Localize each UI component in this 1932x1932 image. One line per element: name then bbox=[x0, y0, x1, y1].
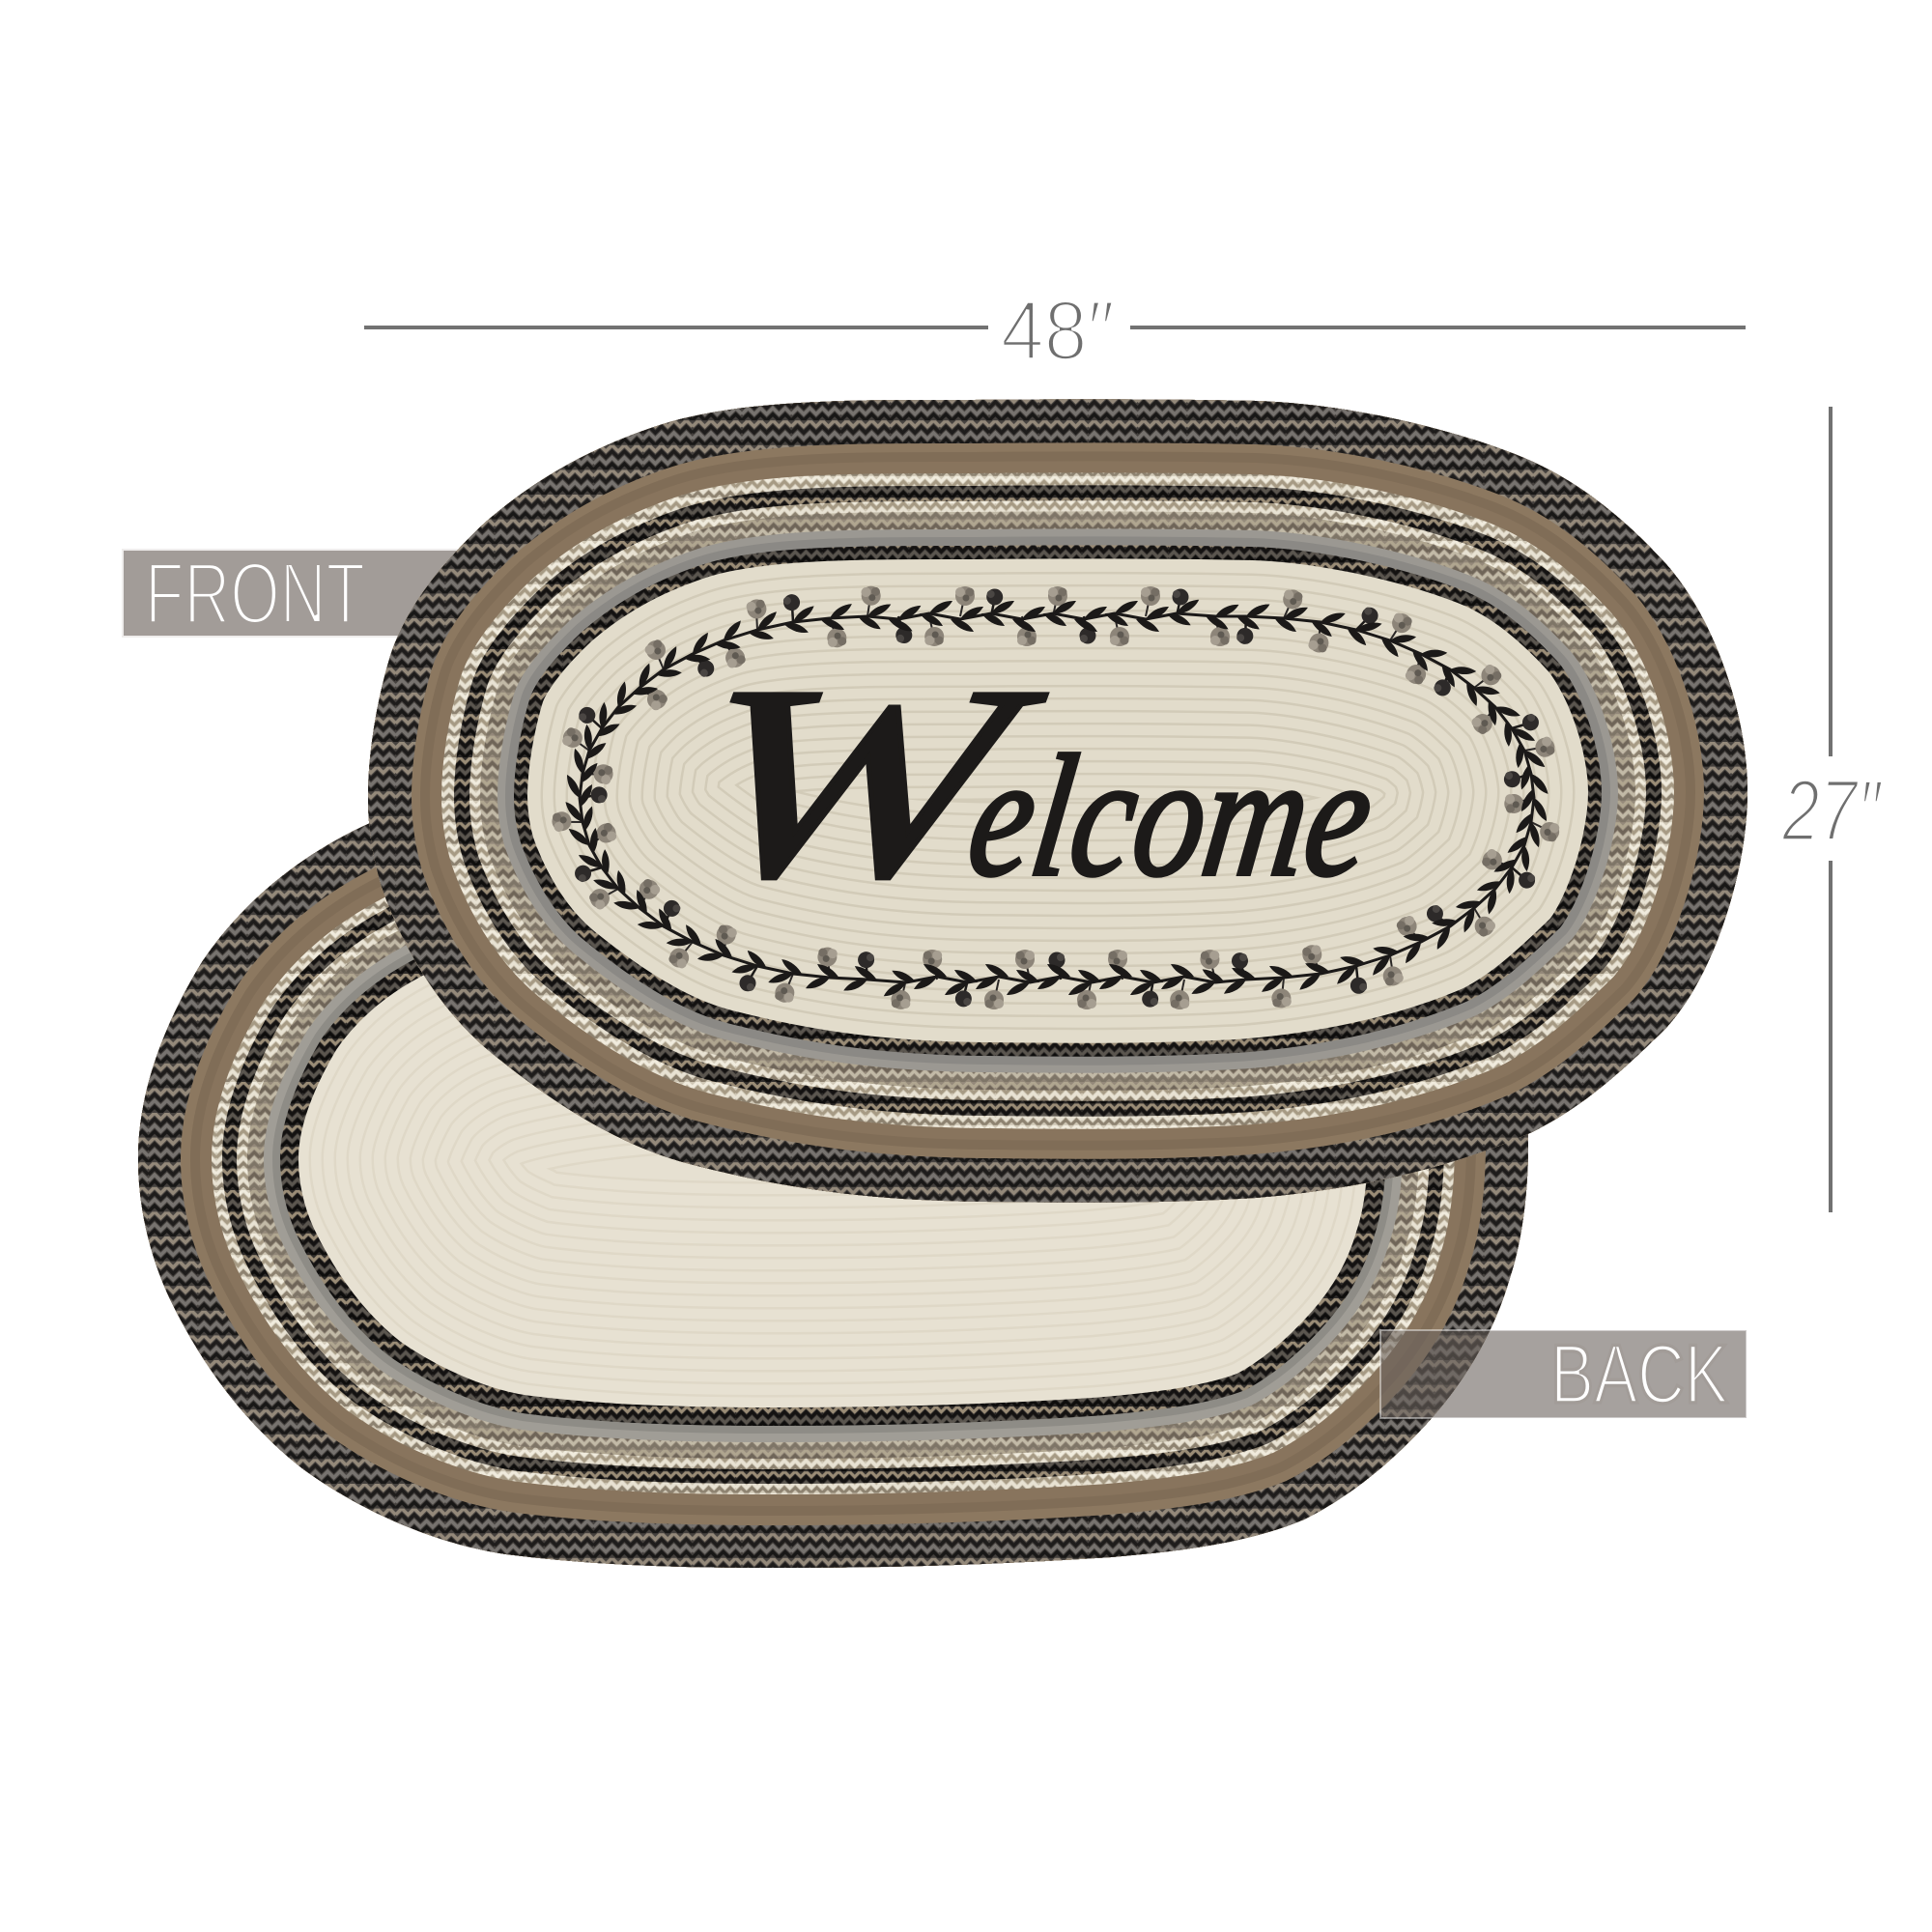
front rug: Welcome script: elcome bbox=[958, 721, 1383, 913]
infographic canvas bbox=[122, 302, 1882, 1568]
width dimension: 48 inches: 48″ bbox=[1001, 284, 1115, 378]
back rug: braided border bands bbox=[138, 763, 1528, 1568]
front rug: floral vine garland bbox=[580, 613, 1534, 982]
label: back: BACK bbox=[1550, 1328, 1728, 1421]
width dimension: 48 inches bbox=[364, 284, 1746, 378]
label: front: FRONT bbox=[145, 546, 365, 642]
front rug: woven body and border bbox=[368, 399, 1747, 1203]
front rug: Welcome script: W bbox=[675, 629, 1061, 934]
height dimension: 27 inches: 27″ bbox=[1781, 763, 1883, 860]
rug: back side bbox=[138, 763, 1528, 1568]
back rug: cream concentric rows bbox=[138, 763, 1528, 1568]
rug: front side bbox=[368, 399, 1747, 1203]
label: back bbox=[1380, 1328, 1747, 1421]
height dimension: 27 inches bbox=[1781, 407, 1883, 1212]
